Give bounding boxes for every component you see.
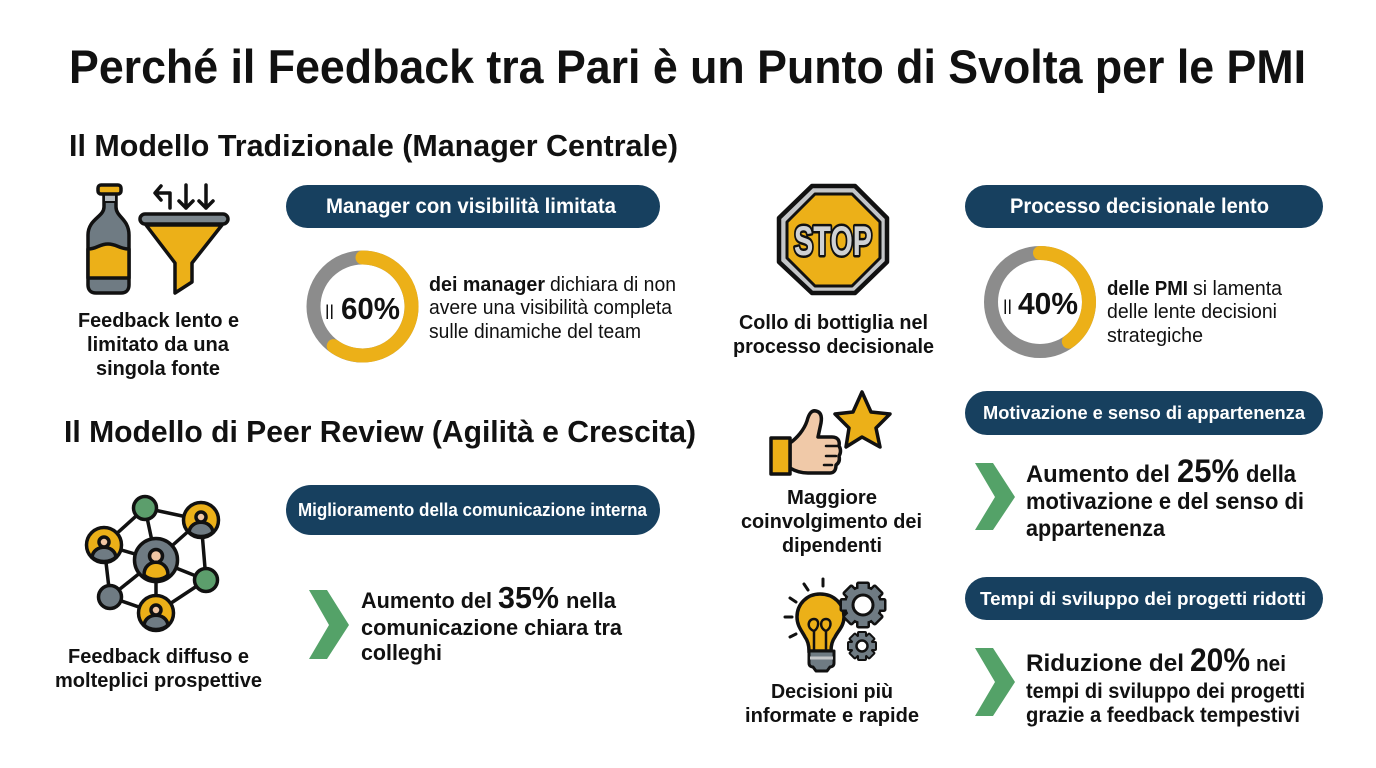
donut chart: 40%: 40% (1018, 286, 1078, 321)
text: development statistic: Riduzione del (1026, 650, 1184, 677)
pill heading: development times: Tempi di sviluppo dei progetti ridotti (980, 588, 1306, 609)
caption: diffuse feedback (55, 645, 262, 692)
text: development statistic: nei (1256, 651, 1286, 676)
text: motivation statistic (1026, 453, 1304, 541)
pill heading: development times (965, 577, 1323, 620)
text: SME statistic: delle lente decisioni (1107, 301, 1277, 323)
caption: better decisions (745, 680, 919, 727)
text: communication statistic: Aumento del (361, 588, 492, 613)
panel: slow decisions (965, 185, 1323, 351)
donut chart: 60% (314, 257, 412, 356)
text: motivation statistic: Aumento del (1026, 461, 1170, 488)
text: manager statistic: dei manager (429, 274, 545, 296)
text: communication statistic: comunicazione chiara tra (361, 615, 623, 640)
heading: traditional model: Il Modello Tradizionale (Manager Centrale) (69, 128, 678, 163)
pill heading: slow decisions: Processo decisionale lento (1010, 195, 1269, 218)
text: motivation statistic: della (1246, 461, 1297, 488)
pill heading: slow decisions (965, 185, 1323, 228)
donut chart: 40% (991, 253, 1089, 351)
arrow: chevron communication (309, 590, 349, 659)
text: manager statistic: dichiara di non (550, 274, 676, 296)
pill heading: internal communication: Miglioramento della comunicazione interna (298, 499, 648, 520)
text: communication statistic: 35% (498, 580, 559, 615)
icon: light bulb and gears (785, 579, 884, 671)
caption: diffuse feedback: molteplici prospettive (55, 669, 262, 692)
text: development statistic: 20% (1190, 642, 1250, 678)
panel: decision bottleneck (733, 186, 934, 358)
arrow: chevron motivation (975, 463, 1015, 530)
icon: thumbs up and star (771, 392, 890, 474)
caption: employee engagement (741, 486, 922, 557)
panel: diffuse feedback (55, 496, 262, 692)
text: motivation statistic: motivazione e del senso di (1026, 488, 1304, 514)
caption: better decisions: Decisioni più (771, 680, 893, 703)
panel: employee engagement (741, 392, 922, 557)
caption: limited feedback: limitato da una (87, 333, 230, 356)
icon: people network (86, 496, 218, 630)
caption: employee engagement: Maggiore (787, 486, 877, 509)
caption: limited feedback: Feedback lento e (78, 309, 239, 332)
title: Perché il Feedback tra Pari è un Punto di Svolta per le PMI (69, 40, 1306, 93)
panel: motivation (965, 391, 1323, 541)
panel: manager visibility (286, 185, 676, 356)
text: manager statistic: sulle dinamiche del team (429, 321, 641, 343)
panel: development times (965, 577, 1323, 727)
pill heading: manager visibility (286, 185, 660, 228)
panel: better decisions (745, 579, 919, 727)
icon: stop sign: STOP (794, 217, 872, 264)
text: SME statistic: strategiche (1107, 325, 1203, 347)
text: SME statistic: si lamenta (1193, 278, 1283, 300)
text: motivation statistic: appartenenza (1026, 515, 1165, 541)
caption: decision bottleneck (733, 311, 934, 358)
pill heading: motivation: Motivazione e senso di appartenenza (983, 402, 1306, 423)
pill heading: motivation (965, 391, 1323, 435)
donut chart: 60%: 60% (341, 291, 400, 326)
text: development statistic: grazie a feedback tempestivi (1026, 704, 1300, 727)
icon: bottle and funnel (88, 185, 228, 293)
text: development statistic: tempi di sviluppo dei progetti (1026, 680, 1305, 703)
caption: decision bottleneck: processo decisionale (733, 335, 934, 358)
caption: limited feedback (78, 309, 239, 380)
caption: limited feedback: singola fonte (96, 357, 220, 380)
donut chart: 60%: II (325, 301, 334, 324)
text: motivation statistic: 25% (1177, 453, 1239, 489)
pill heading: internal communication (286, 485, 660, 535)
text: SME statistic: delle PMI (1107, 278, 1188, 300)
icon: stop sign (779, 186, 887, 293)
caption: diffuse feedback: Feedback diffuso e (68, 645, 249, 668)
text: SME statistic (1107, 278, 1283, 347)
heading: peer review model: Il Modello di Peer Review (Agilità e Crescita) (64, 414, 696, 449)
donut chart: 40%: II (1003, 296, 1012, 319)
caption: employee engagement: coinvolgimento dei (741, 510, 922, 533)
text: communication statistic (361, 580, 623, 665)
panel: limited feedback (78, 185, 239, 380)
panel: internal communication (286, 485, 660, 665)
text: communication statistic: colleghi (361, 640, 442, 665)
text: communication statistic: nella (566, 588, 617, 613)
caption: decision bottleneck: Collo di bottiglia nel (739, 311, 928, 334)
text: manager statistic (429, 274, 676, 343)
text: manager statistic: avere una visibilità completa (429, 297, 673, 319)
pill heading: manager visibility: Manager con visibilità limitata (326, 195, 616, 218)
text: development statistic (1026, 642, 1305, 727)
caption: better decisions: informate e rapide (745, 704, 919, 727)
caption: employee engagement: dipendenti (782, 534, 882, 557)
arrow: chevron development (975, 648, 1015, 716)
